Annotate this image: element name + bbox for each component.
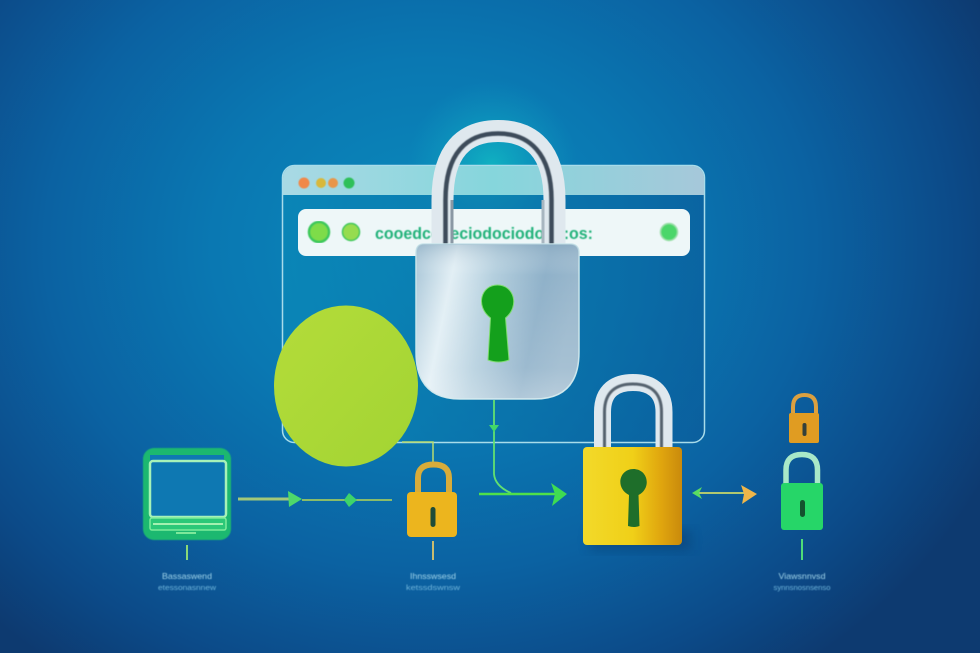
label: small gold padlock [406, 571, 461, 592]
arrow: two-way to green padlock [692, 485, 757, 504]
lime circle [274, 306, 418, 466]
body [416, 244, 579, 399]
label: small gold padlock: Ihnsswsesd [410, 571, 456, 581]
label: device [158, 571, 217, 592]
label: small gold padlock: ketssdswnsw [406, 585, 461, 592]
label: green padlock: synnsnosnsenso [774, 585, 831, 592]
icon: small gold padlock [407, 464, 457, 537]
tick under device [186, 545, 188, 560]
window control dots [298, 178, 354, 188]
connector: large lock down to arrow [479, 400, 567, 506]
address bar status icons [309, 222, 678, 242]
tick under green padlock [801, 539, 803, 560]
icon: device screen [143, 448, 231, 540]
address bar [298, 209, 690, 256]
icon: green padlock [781, 454, 823, 530]
arrow: device to small lock [238, 491, 392, 507]
icon: yellow padlock [583, 382, 682, 545]
shadow under yellow padlock [590, 530, 690, 550]
icon: small orange padlock [789, 395, 819, 443]
tick under small gold padlock [432, 541, 434, 560]
connector: circle to small lock [402, 442, 433, 464]
glow behind shackle [390, 70, 600, 260]
label: device: Bassaswend [162, 571, 212, 581]
panel: browser window [282, 166, 704, 442]
icon: large steel padlock [416, 131, 579, 399]
label: device: etessonasnnew [158, 585, 217, 592]
shackle [442, 131, 554, 250]
browser title bar [283, 166, 704, 195]
label: green padlock [774, 571, 831, 592]
address bar text: cooedcodeciodociodoiot:os: [375, 224, 593, 243]
keyhole [482, 285, 514, 362]
label: green padlock: Viawsnnvsd [778, 571, 826, 581]
